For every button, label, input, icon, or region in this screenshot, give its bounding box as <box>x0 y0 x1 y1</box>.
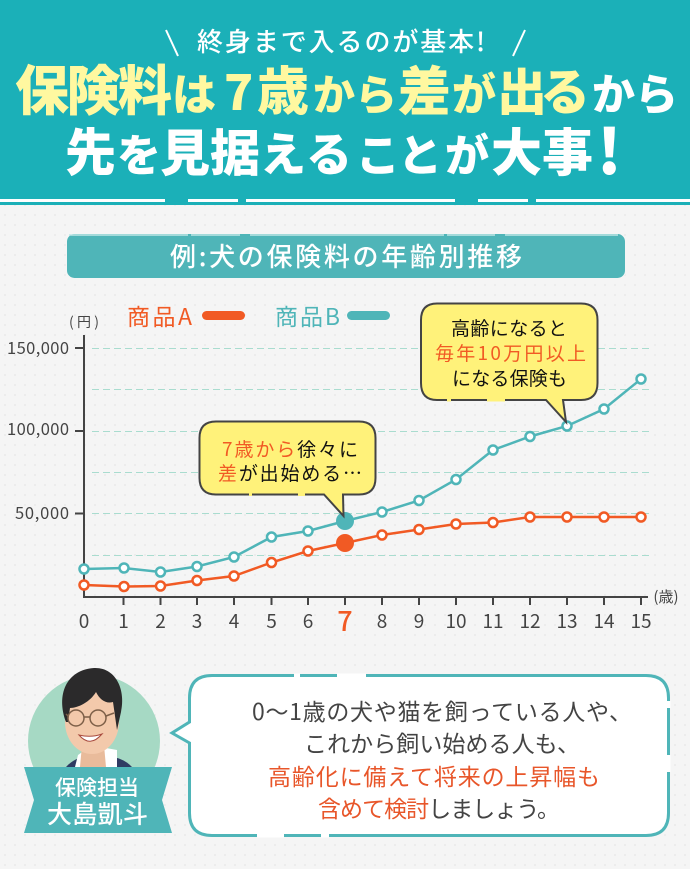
title line 1: が <box>452 59 496 123</box>
title line 2: 先 <box>65 112 116 186</box>
title line 1 <box>15 47 678 126</box>
series B <box>80 374 646 576</box>
axes <box>75 335 648 605</box>
legend: 商品B <box>275 298 340 332</box>
callout: senior: になる保険も <box>452 364 567 391</box>
legend <box>127 298 390 332</box>
name ribbon: 保険担当 <box>55 772 139 802</box>
x axis labels: 1 <box>118 607 129 634</box>
y axis labels: (円) <box>69 312 99 332</box>
x axis labels: 15 <box>630 607 652 634</box>
x axis labels: 7 <box>337 600 353 639</box>
callout: age 7 <box>200 422 376 516</box>
x axis labels: 5 <box>266 607 277 634</box>
bubble text: 高齢化に備えて将来の上昇幅も <box>268 758 600 792</box>
x axis labels: 2 <box>155 607 166 634</box>
callout: senior <box>421 304 598 422</box>
x axis labels: 11 <box>482 607 504 634</box>
x axis labels: 14 <box>593 607 615 634</box>
title line 1: 歳 <box>257 50 309 125</box>
x axis labels: 8 <box>377 607 387 634</box>
x axis labels: 0 <box>79 607 89 634</box>
series A <box>80 512 646 591</box>
legend: 商品A <box>127 298 192 332</box>
x axis labels: (歳) <box>653 586 679 607</box>
subtitle: 終身まで入るのが基本! <box>197 22 485 59</box>
title line 1: から <box>313 62 397 123</box>
title line 2 <box>65 102 622 192</box>
section heading bar <box>66 234 626 278</box>
x axis labels: 9 <box>414 607 424 634</box>
name ribbon <box>24 767 172 833</box>
title line 1: は <box>172 59 216 123</box>
title line 1: から <box>592 61 678 123</box>
title line 2: こと <box>356 120 442 184</box>
callout: age 7: 7歳から徐々に <box>222 435 358 462</box>
callout: senior: 毎年10万円以上 <box>435 339 586 366</box>
x axis labels <box>79 586 679 639</box>
x axis labels: 10 <box>445 607 467 634</box>
x axis labels: 3 <box>192 607 202 634</box>
y axis labels: 150,000 <box>7 335 69 359</box>
callout: age 7: 差が出始める… <box>218 459 362 486</box>
name ribbon: 大島凱斗 <box>47 795 148 831</box>
bubble text: 含めて検討しましょう。 <box>318 790 560 824</box>
bubble text <box>252 693 632 824</box>
header banner <box>0 0 690 205</box>
title line 1: 7 <box>224 54 253 124</box>
y axis labels: 100,000 <box>7 416 69 440</box>
line chart <box>7 312 679 639</box>
title line 2: 大事 <box>491 112 593 186</box>
x axis labels: 13 <box>556 607 578 634</box>
grid lines <box>92 348 649 556</box>
title line 2: ! <box>597 102 622 192</box>
portrait <box>28 668 160 767</box>
title line 1: 保険料 <box>15 47 172 126</box>
y axis labels: 50,000 <box>15 500 69 524</box>
title line 2: が <box>445 120 489 184</box>
title line 1: 差 <box>398 50 451 126</box>
bubble text: これから飼い始める人も、 <box>304 725 580 759</box>
title line 2: える <box>260 119 352 185</box>
x axis labels: 12 <box>519 607 541 634</box>
section heading bar: 例:犬の保険料の年齢別推移 <box>170 237 522 274</box>
title line 1: 出る <box>497 53 590 125</box>
x axis labels: 6 <box>303 607 313 634</box>
bubble text: 0〜1歳の犬や猫を飼っている人や、 <box>252 693 632 727</box>
x axis labels: 4 <box>229 607 239 634</box>
title line 2: 見据 <box>160 114 260 186</box>
title line 2: を <box>117 120 161 184</box>
y axis labels <box>7 312 99 524</box>
speech bubble <box>172 676 668 836</box>
callout: senior: 高齢になると <box>451 314 567 341</box>
